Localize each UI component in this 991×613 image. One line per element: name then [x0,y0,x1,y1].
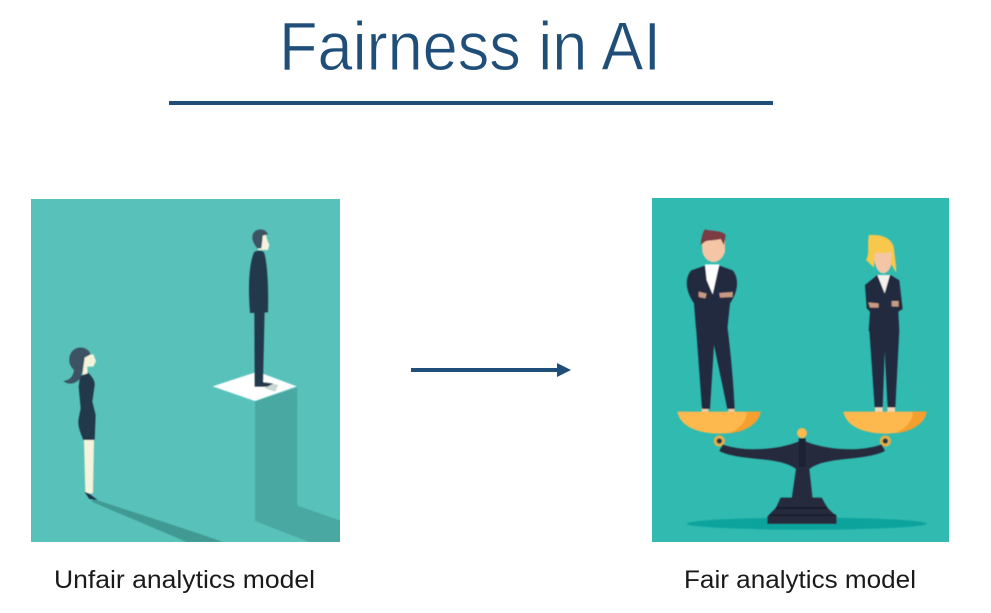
icon: standing man [249,229,278,392]
pillar side and shadow [255,388,342,545]
title underline [169,101,773,105]
panel: unfair analytics model [31,199,342,545]
icon: standing woman [63,347,223,542]
arrow [411,363,571,377]
icon: balance scale [677,412,927,524]
icon: man on scale [687,229,737,413]
left caption: Unfair analytics model [54,566,315,594]
panel: fair analytics model [652,198,949,542]
white platform [213,372,297,401]
icon: woman on scale [865,235,903,413]
scale shadow [687,518,927,530]
right caption: Fair analytics model [684,566,916,594]
title: Fairness in AI [279,8,661,85]
